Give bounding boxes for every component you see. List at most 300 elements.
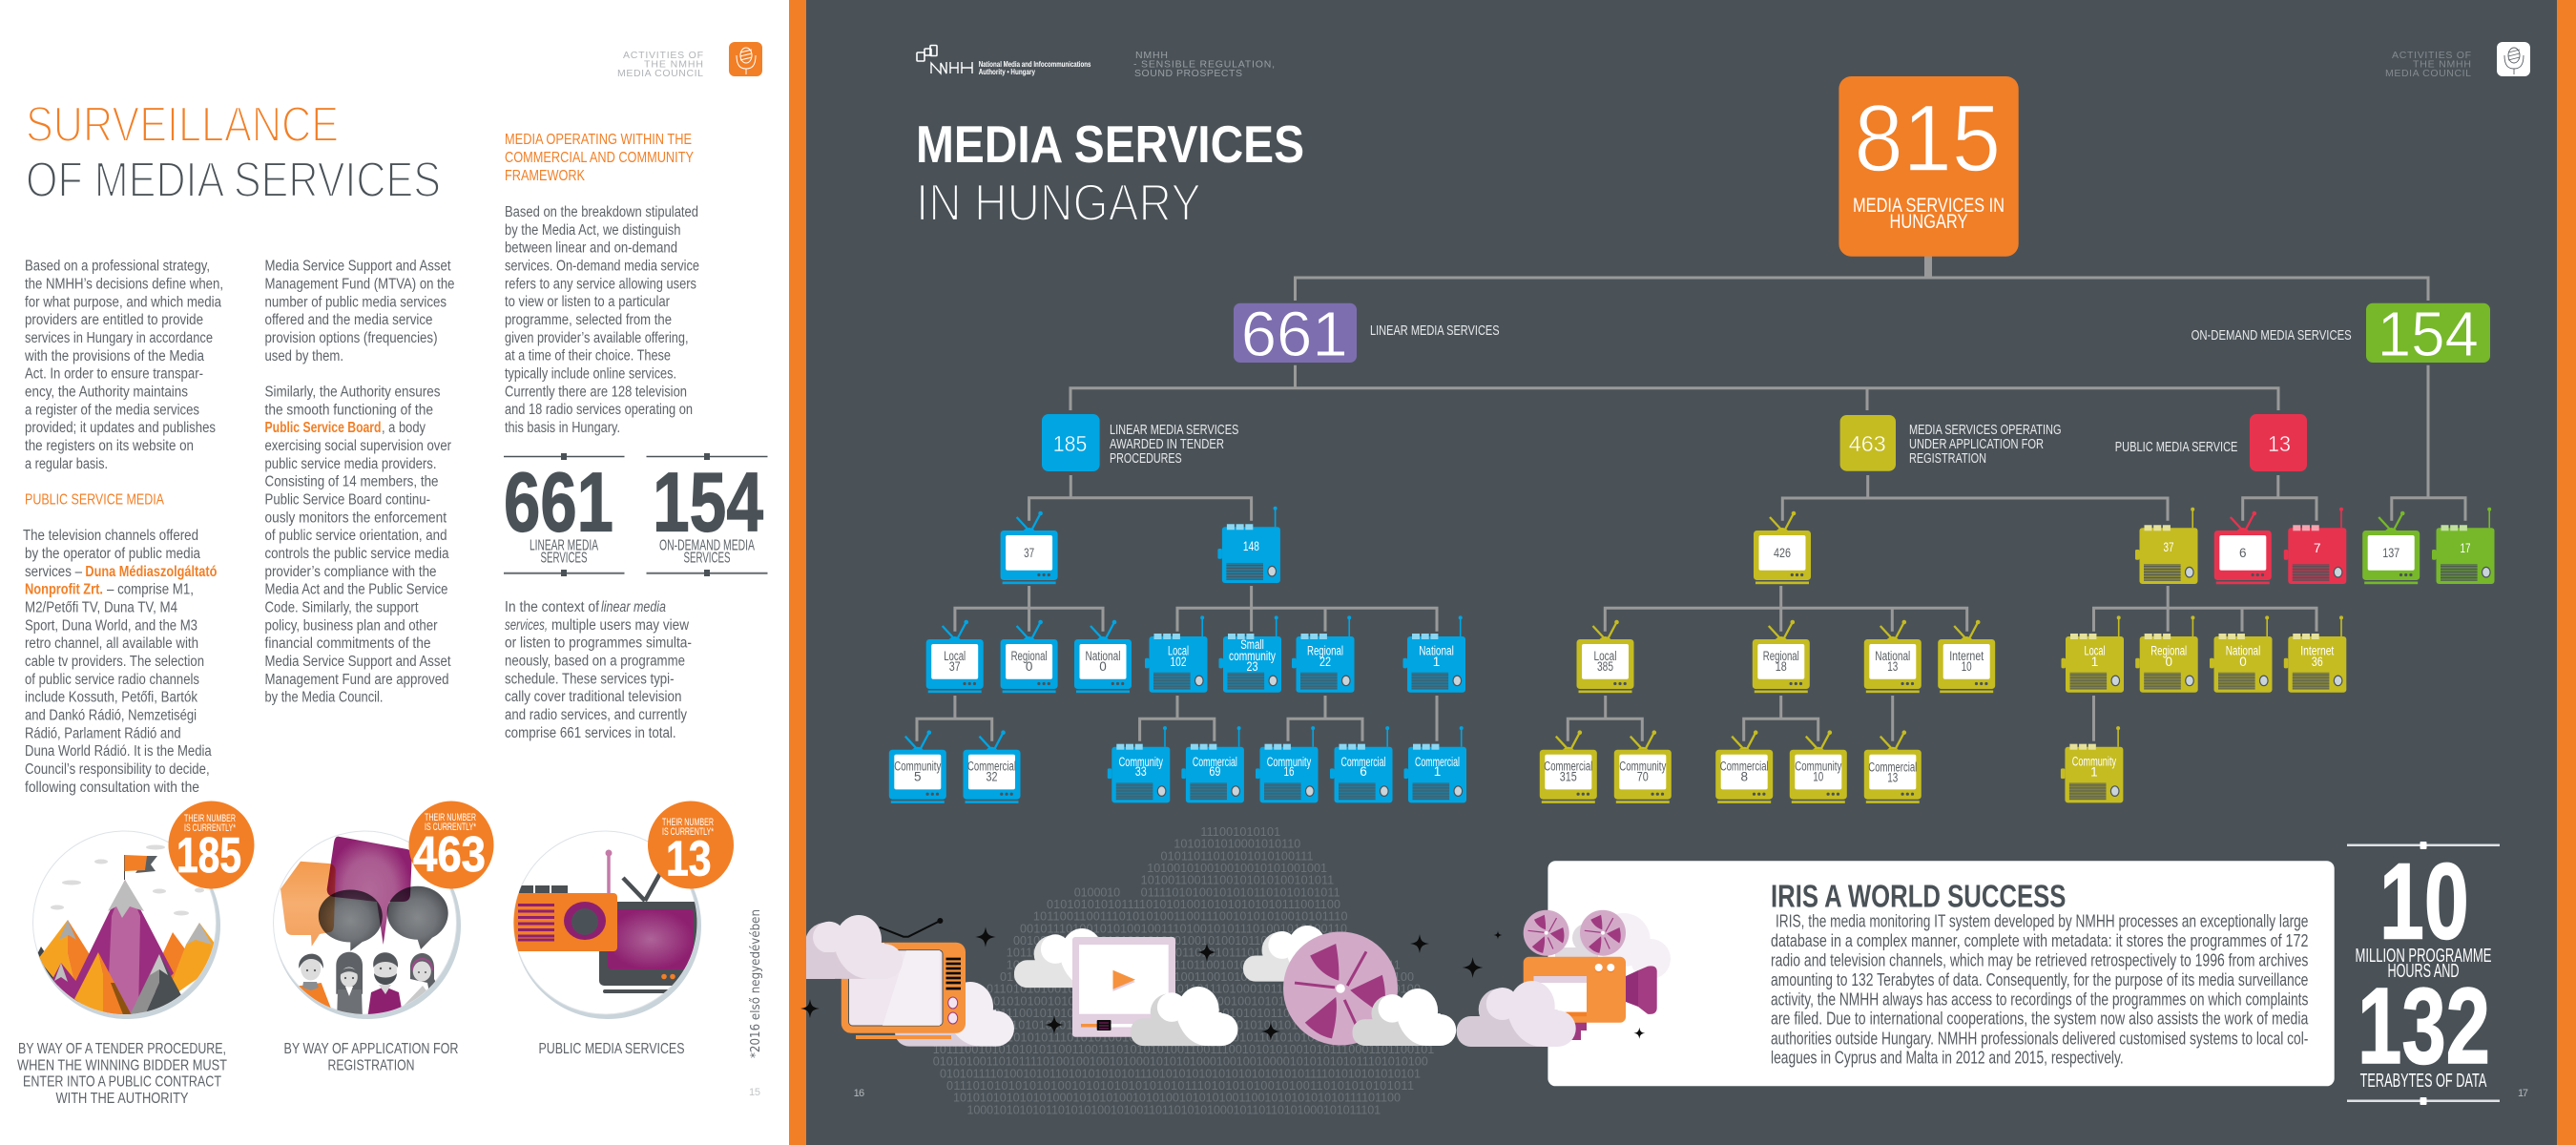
logo: NMHH xyxy=(917,46,1091,76)
tv: national 13: 13 xyxy=(1887,659,1898,674)
tv: regional 18: 18 xyxy=(1776,659,1787,674)
text column 1: provided; it updates and publishes xyxy=(25,420,216,436)
tv: commercial 13: 13 xyxy=(1887,771,1898,785)
tv: regional 0: Regional xyxy=(1011,649,1048,663)
title: media services in Hungary: MEDIA SERVICES xyxy=(916,114,1304,174)
page number 15: 15 xyxy=(749,1087,760,1098)
text column 1: PUBLIC SERVICE MEDIA xyxy=(25,492,165,508)
text column 1: Rádió, Parlament Rádió and xyxy=(25,725,181,741)
radio: regional 22: 22 xyxy=(1319,655,1331,669)
text column 3 lower: and radio services, and currently xyxy=(505,707,687,723)
radio: regional 0 xyxy=(2135,615,2198,693)
binary code cloud: 111001010101 xyxy=(1200,825,1280,839)
IRIS body text: leagues in Cyprus and Malta in 2012 and 2015, respectively. xyxy=(1771,1048,2124,1067)
tv: commercial 315: Commercial xyxy=(1544,760,1592,774)
person: woman in grey xyxy=(336,952,363,1021)
section header: left: MEDIA COUNCIL xyxy=(617,68,703,79)
binary code cloud: 10101010010101100101010101101100101010010101011010100101011 xyxy=(1007,958,1401,971)
tv: 6: 6 xyxy=(2239,546,2247,560)
radio: internet 36 xyxy=(2284,615,2346,693)
tv: commercial 315: 315 xyxy=(1560,770,1577,784)
tv: internet 10 xyxy=(1938,620,1995,693)
caption: public media services: PUBLIC MEDIA SERVICES xyxy=(538,1041,685,1057)
IRIS body text xyxy=(1771,912,2309,1067)
text column 2: Code. Similarly, the support xyxy=(265,599,419,615)
binary code cloud: 0010010101010010100101010100101001011010101001010101 xyxy=(1013,934,1361,947)
caption: tender procedure: WITH THE AUTHORITY xyxy=(55,1091,189,1107)
text column 1: the NMHH’s decisions define when, xyxy=(25,277,223,292)
label: linear media services: LINEAR MEDIA SERVICES xyxy=(1370,323,1500,339)
binary code cloud: 0111010101010101001010101010101010111010101010010100110101010101011 xyxy=(946,1079,1414,1093)
text column 3 upper: this basis in Hungary. xyxy=(505,420,620,436)
radio: community 33: Community xyxy=(1119,755,1163,769)
badge: 463: THEIR NUMBER xyxy=(425,812,476,823)
stat: 154 on-demand media services xyxy=(647,453,767,576)
radio: community 16 xyxy=(1256,726,1319,802)
label: public media service: PUBLIC MEDIA SERVICE xyxy=(2115,439,2237,455)
text column 1: following consultation with the xyxy=(25,780,199,796)
illustration: media player tablet with clouds xyxy=(1014,928,1238,1046)
icon: microphone white xyxy=(2497,42,2530,76)
stat: 154 on-demand media services: 154 xyxy=(653,455,763,550)
stat block: 10 million hours and 132 terabytes: HOURS AND xyxy=(2387,961,2460,982)
stat block: 10 million hours and 132 terabytes: 132 xyxy=(2358,966,2490,1086)
illustration: film camera with clouds xyxy=(1457,910,1671,1047)
caption: tender procedure: ENTER INTO A PUBLIC CONTRACT xyxy=(23,1074,221,1091)
binary code cloud: 101001010010010010101001001 xyxy=(1147,862,1327,875)
text column 2: Media Service Support and Asset xyxy=(265,654,451,670)
text column 1: services – xyxy=(25,564,82,580)
text column 1: Act. In order to ensure transpar- xyxy=(25,366,203,383)
text column 1: Sport, Duna World, and the M3 xyxy=(25,617,197,634)
binary code cloud: 011101010101010010101010100101101010010101001010101010100101010111 xyxy=(979,1019,1426,1032)
radio: 148 xyxy=(1217,507,1280,583)
text column 2: Consisting of 14 members, the xyxy=(265,474,439,490)
tv: regional 0 xyxy=(1001,620,1058,693)
text column 2: Public Service Board xyxy=(265,420,382,436)
text column 1: retro channel, all available with xyxy=(25,635,198,652)
text column 3 upper: typically include online services. xyxy=(505,366,676,382)
text column 3 lower: linear media xyxy=(601,599,666,615)
connectors: branches xyxy=(917,365,2465,741)
illustration: mountains with flag xyxy=(31,831,220,1019)
radio: 37: 37 xyxy=(2164,540,2173,554)
heading: media operating: MEDIA OPERATING WITHIN THE xyxy=(505,132,692,148)
text column 1 xyxy=(23,259,223,796)
caption: tender procedure xyxy=(17,1041,227,1107)
tv: 426: 426 xyxy=(1774,546,1791,560)
label: tender: AWARDED IN TENDER xyxy=(1110,436,1224,452)
IRIS body text: activity, the NMHH always has access to recordings of the programmes on which complaints xyxy=(1771,989,2308,1009)
stat: 154 on-demand media services: ON-DEMAND MEDIA xyxy=(659,538,755,553)
text column 3 upper: Currently there are 128 television xyxy=(505,384,687,400)
text column 2: , a body xyxy=(382,420,426,436)
illustration: orange retro television with clouds xyxy=(783,915,1014,1047)
text column 1: for what purpose, and which media xyxy=(25,294,221,310)
box: 463 xyxy=(1840,415,1896,471)
box: 185 xyxy=(1042,414,1100,471)
radio: 148: 148 xyxy=(1243,539,1259,553)
radio: small community 23: community xyxy=(1229,649,1276,663)
tv: commercial 32: 32 xyxy=(987,770,998,784)
logo: NMHH: Authority • Hungary xyxy=(979,67,1035,76)
IRIS body text: are filed. Due to international cooperations, the system now also assists the work of media xyxy=(1771,1010,2309,1029)
radio: 17: 17 xyxy=(2460,541,2471,555)
tv: local 385: Local xyxy=(1593,649,1616,663)
badge: 13: IS CURRENTLY* xyxy=(662,826,714,838)
radio: commercial 6: 6 xyxy=(1360,764,1367,779)
box: 13: 13 xyxy=(2268,431,2291,456)
text column 2: Management Fund are approved xyxy=(265,672,448,688)
radio: regional 0: Regional xyxy=(2150,643,2187,658)
label: on-demand media services: ON-DEMAND MEDIA SERVICES xyxy=(2192,327,2352,344)
caption: application for registration: BY WAY OF APPLICATION FOR xyxy=(284,1041,458,1057)
radio: national 0: National xyxy=(2226,643,2260,658)
title: media services in Hungary: IN HUNGARY xyxy=(916,173,1201,232)
text column 3 upper: and 18 radio services operating on xyxy=(505,402,693,418)
label: application: UNDER APPLICATION FOR xyxy=(1909,436,2044,452)
text column 2: policy, business plan and other xyxy=(265,617,437,634)
binary code cloud: 1000101010101101010100101001101101010100010110110101000101011101 xyxy=(967,1103,1381,1116)
radio: community 1: 1 xyxy=(2090,765,2098,779)
text column 3 lower: multiple users may view xyxy=(551,617,690,634)
box: 815 media services in Hungary xyxy=(1839,76,2019,257)
box: 154 on-demand: 154 xyxy=(2378,299,2479,370)
text column 1: by the operator of public media xyxy=(25,546,200,562)
box: 815 media services in Hungary: HUNGARY xyxy=(1889,211,1967,233)
IRIS body text: authorities outside Hungary. NMHH professionals delivered customised systems to local col- xyxy=(1771,1029,2308,1048)
text column 3 lower xyxy=(505,599,692,741)
label: tender: PROCEDURES xyxy=(1110,450,1182,467)
text column 2: controls the public service media xyxy=(265,546,449,562)
radio: community 1: Community xyxy=(2072,754,2116,769)
badge: 13: THEIR NUMBER xyxy=(662,817,714,828)
logo: NMHH: National Media and Infocommunications xyxy=(979,59,1091,69)
tv: local 37: 37 xyxy=(949,659,961,674)
badge: 185: IS CURRENTLY* xyxy=(184,822,236,834)
illustration: radio and television xyxy=(506,831,701,1019)
tv: community 70 xyxy=(1614,730,1672,803)
stat: 154 on-demand media services: SERVICES xyxy=(683,550,731,567)
stat block: 10 million hours and 132 terabytes: MILLION PROGRAMME xyxy=(2355,946,2492,967)
tv: national 13: National xyxy=(1875,649,1910,663)
binary code cloud: 10110011001110101010011001110010101010010101110 xyxy=(1033,910,1347,924)
radio: regional 0: 0 xyxy=(2165,655,2172,669)
binary code cloud: 10101010101010100010101010010101001010101001100101010101010111101100 xyxy=(953,1092,1401,1105)
radio: community 1 xyxy=(2061,726,2123,802)
tagline: NMHH xyxy=(1135,50,1168,61)
text column 2: Similarly, the Authority ensures xyxy=(265,384,441,401)
text column 3 upper: given provider’s available offering, xyxy=(505,330,689,346)
text column 2: Management Fund (MTVA) on the xyxy=(265,277,454,292)
text column 3 upper: by the Media Act, we distinguish xyxy=(505,222,681,239)
title: surveillance of media services: SURVEILLANCE xyxy=(26,97,339,153)
box: 13 xyxy=(2250,414,2307,471)
radio: community 33: 33 xyxy=(1135,764,1147,779)
radio: local 102 xyxy=(1145,615,1208,693)
tv: 37: 37 xyxy=(1024,546,1034,560)
text column 1: a register of the media services xyxy=(25,402,199,418)
radio: internet 36: Internet xyxy=(2300,643,2334,658)
box: 463: 463 xyxy=(1849,431,1886,456)
text column 1: services in Hungary in accordance xyxy=(25,330,213,346)
text column 1: with the provisions of the Media xyxy=(24,348,204,364)
text column 1: and Dankó Rádió, Nemzetiségi xyxy=(25,707,197,723)
box: 815 media services in Hungary: MEDIA SERVICES IN xyxy=(1853,195,2005,217)
stat: 661 linear media services xyxy=(504,453,624,576)
section header: right: ACTIVITIES OF xyxy=(2392,50,2471,61)
tv: internet 10: 10 xyxy=(1962,659,1972,674)
text column 3 lower: schedule. These services typi- xyxy=(505,671,674,687)
text column 2: by the Media Council. xyxy=(265,690,384,706)
text column 1: the registers on its website on xyxy=(25,438,194,454)
panel: IRIS text card xyxy=(1548,861,2335,1086)
text column 2: number of public media services xyxy=(265,294,447,310)
binary code cloud: 1011001010101010010101001011010101110101001010110101010 xyxy=(1007,947,1376,960)
text column 1: include Kossuth, Petőfi, Bartók xyxy=(25,690,197,706)
section header: right xyxy=(2385,50,2471,79)
badge: 13: 13 xyxy=(666,832,712,887)
text column 3 lower: cally cover traditional television xyxy=(505,689,681,705)
IRIS body text: amounting to 132 Terabytes of data. Consequently, for the purpose of its media surveillance xyxy=(1771,970,2308,989)
stat block: 10 million hours and 132 terabytes: TERABYTES OF DATA xyxy=(2360,1071,2487,1092)
tv: regional 18 xyxy=(1753,620,1810,693)
root thick stem xyxy=(1924,256,1932,278)
title: surveillance of media services: OF MEDIA SERVICES xyxy=(26,153,441,208)
heading: media operating: COMMERCIAL AND COMMUNITY xyxy=(505,150,694,166)
page numbers xyxy=(854,1088,2528,1099)
binary code cloud: 01011011010101010100111 xyxy=(1160,849,1313,863)
radio: regional 22 xyxy=(1292,615,1355,693)
person: man in orange xyxy=(299,954,331,1008)
radio: small community 23 xyxy=(1219,615,1281,693)
caption: application for registration: REGISTRATION xyxy=(328,1057,414,1073)
text column 2: exercising social supervision over xyxy=(265,438,451,454)
tree: blue tender branch xyxy=(889,507,1466,803)
section header: left: THE NMHH xyxy=(644,59,703,71)
label: application xyxy=(1909,422,2061,467)
tv: commercial 8: 8 xyxy=(1740,770,1748,784)
connectors: root level xyxy=(1296,256,2428,301)
text column 3 lower: neously, based on a programme xyxy=(505,653,685,670)
tagline: - SENSIBLE REGULATION, xyxy=(1133,59,1275,71)
stat: 661 linear media services: LINEAR MEDIA xyxy=(530,538,598,553)
tv: commercial 8: Commercial xyxy=(1720,760,1769,774)
tree: red public branch xyxy=(2214,508,2346,584)
tv: internet 10: Internet xyxy=(1949,649,1984,663)
icon: sparkles xyxy=(800,926,1502,1041)
person: woman with headband xyxy=(405,953,435,1006)
text column 3 upper: between linear and on-demand xyxy=(505,240,677,257)
heading: media operating: FRAMEWORK xyxy=(505,168,586,184)
text column 1: – comprise M1, xyxy=(107,582,194,598)
section header: right: MEDIA COUNCIL xyxy=(2385,68,2471,79)
radio: local 102: 102 xyxy=(1170,655,1187,669)
panel: left white page xyxy=(0,0,789,1145)
orange right edge xyxy=(2557,0,2576,1145)
tv: community 70: Community xyxy=(1619,760,1666,774)
tv: commercial 32: Commercial xyxy=(967,760,1016,774)
tv: regional 18: Regional xyxy=(1763,649,1799,663)
stat block: 10 million hours and 132 terabytes: 10 xyxy=(2379,841,2469,961)
radio: 7: 7 xyxy=(2314,541,2321,555)
label: application: MEDIA SERVICES OPERATING xyxy=(1909,422,2061,438)
text column 3 upper: at a time of their choice. These xyxy=(505,348,671,364)
binary code cloud: 1010101010001010110 xyxy=(1174,838,1300,851)
text column 1: Council’s responsibility to decide, xyxy=(25,761,210,778)
orange spine xyxy=(789,0,806,1145)
connectors: level 2 xyxy=(1070,365,2278,410)
text column 2 xyxy=(265,259,454,706)
text column 1: of public service radio channels xyxy=(25,672,199,688)
radio: internet 36: 36 xyxy=(2312,655,2323,669)
radio: small community 23: Small xyxy=(1240,637,1264,652)
tv: regional 0: 0 xyxy=(1026,659,1032,674)
text column 1: The television channels offered xyxy=(23,528,198,544)
binary code cloud: 0010111010010101001001110100101011101001010100110 xyxy=(1020,922,1347,935)
radio: community 16: 16 xyxy=(1284,764,1294,779)
radio: commercial 69: Commercial xyxy=(1193,755,1237,769)
title: surveillance of media services xyxy=(26,97,441,208)
title: media services in Hungary xyxy=(916,114,1304,232)
IRIS body text: database in a complex manner, complete with metadata: it stores the programmes of 172 xyxy=(1771,931,2308,950)
text column 3 lower: services, xyxy=(505,617,548,634)
section header: left xyxy=(617,50,703,79)
stat: 661 linear media services: SERVICES xyxy=(540,550,588,567)
binary code cloud: 11011010101011101010100101010101010100101011010101010010101010100101 xyxy=(967,1030,1431,1044)
tv: 137: 137 xyxy=(2382,546,2399,560)
label: tender: LINEAR MEDIA SERVICES xyxy=(1110,422,1238,438)
page numbers: 17 xyxy=(2518,1088,2528,1099)
binary code cloud: 10100110011100101010100101011 xyxy=(1141,874,1334,887)
tagline xyxy=(1133,50,1275,79)
text column 1: providers are entitled to provide xyxy=(25,312,203,328)
radio: commercial 69: 69 xyxy=(1209,764,1220,779)
badge: 185: 185 xyxy=(177,828,241,884)
tv: 37 xyxy=(1001,511,1058,584)
tv: national 0: National xyxy=(1086,649,1121,663)
radio: national 1: 1 xyxy=(1433,655,1440,669)
badge: 463 xyxy=(408,802,494,889)
tv: community 5: 5 xyxy=(914,770,922,784)
text column 1: Duna Médiaszolgáltató xyxy=(85,564,217,580)
radio: national 0 xyxy=(2210,615,2273,693)
text column 2: Media Service Support and Asset xyxy=(265,259,451,275)
tv: local 37 xyxy=(926,620,984,693)
heading: IRIS a world success: IRIS A WORLD SUCCESS xyxy=(1771,879,2066,914)
radio: local 1 xyxy=(2061,615,2124,693)
binary code cloud: 0110101010010101011001010101011011101000101101010010101010100100 xyxy=(987,983,1421,996)
tv: commercial 8 xyxy=(1715,730,1773,803)
tv: commercial 13 xyxy=(1864,730,1922,803)
text column 2: provider’s compliance with the xyxy=(265,564,437,580)
tagline: SOUND PROSPECTS xyxy=(1134,68,1242,79)
label: application: REGISTRATION xyxy=(1909,450,1986,467)
binary code cloud: 0100010 xyxy=(1074,885,1120,899)
radio: community 33 xyxy=(1108,726,1170,802)
text column 2: the smooth functioning of the xyxy=(265,402,433,418)
IRIS body text: IRIS, the media monitoring IT system developed by NMHH processes an exceptionally large xyxy=(1776,912,2308,931)
box: 185: 185 xyxy=(1053,431,1087,456)
radio: local 102: Local xyxy=(1168,643,1189,658)
radio: small community 23: 23 xyxy=(1246,659,1257,674)
text column 1: cable tv providers. The selection xyxy=(25,654,204,670)
text column 2: Media Act and the Public Service xyxy=(265,582,448,598)
tv: community 10: Community xyxy=(1795,760,1841,774)
IRIS body text: radio and television channels, which may be retrieved retrospectively to 1996 from archives xyxy=(1771,951,2308,970)
label: tender xyxy=(1110,422,1238,467)
radio: commercial 6: Commercial xyxy=(1341,755,1385,769)
radio: local 1: 1 xyxy=(2091,655,2098,669)
radio: commercial 1: 1 xyxy=(1434,764,1441,779)
binary code cloud xyxy=(933,825,1434,1116)
text column 3 upper xyxy=(505,204,699,436)
caption: tender procedure: BY WAY OF A TENDER PROCEDURE, xyxy=(18,1041,226,1057)
tv: community 5: Community xyxy=(894,760,941,774)
badge: 185 xyxy=(168,802,254,889)
text column 2: financial commitments of the xyxy=(265,635,431,652)
tree: gold registration branch xyxy=(1540,508,2346,803)
text column 3 lower: or listen to programmes simulta- xyxy=(505,635,692,652)
illustration: speech bubbles and people xyxy=(273,831,461,1026)
page numbers: 16 xyxy=(854,1088,864,1099)
binary code cloud: 1011100101010101110010101011010010101010101101010010101010100101 xyxy=(987,1007,1421,1020)
tv: 426 xyxy=(1754,511,1811,584)
tv: national 0: 0 xyxy=(1099,659,1107,674)
box: 815 media services in Hungary: 815 xyxy=(1855,85,2001,191)
section header: right: THE NMHH xyxy=(2413,59,2471,71)
binary code cloud: 1011100101010101011001100111010101010011001110010101010010101110001101100101 xyxy=(933,1043,1434,1056)
badge: 13 xyxy=(648,802,734,889)
binary code cloud: 01010111101001010110101010101011101010101010101010101010111101010101010101 xyxy=(940,1067,1421,1080)
text column 3 upper: to view or listen to a particular xyxy=(505,294,670,310)
tv: community 10: 10 xyxy=(1813,770,1823,784)
radio: national 1: National xyxy=(1419,643,1454,658)
radio: commercial 6 xyxy=(1330,726,1393,802)
text column 3 upper: programme, selected from the xyxy=(505,312,672,328)
text column 2: used by them. xyxy=(265,348,343,364)
tv: commercial 32 xyxy=(964,730,1021,803)
illustration: film reel with clouds xyxy=(1243,926,1456,1046)
text column 2: provision options (frequencies) xyxy=(265,330,437,346)
binary code cloud: 01010101001010101001010011100110010101010011100101010101001100 xyxy=(1000,970,1414,984)
tv: community 70: 70 xyxy=(1637,770,1649,784)
text column 1: Nonprofit Zrt. xyxy=(25,582,103,598)
radio: regional 22: Regional xyxy=(1307,643,1343,658)
text column 1: ency, the Authority maintains xyxy=(25,384,188,401)
radio: local 1: Local xyxy=(2084,643,2105,658)
radio: commercial 69 xyxy=(1181,726,1244,802)
stat: 661 linear media services: 661 xyxy=(504,455,613,550)
tv: local 385: 385 xyxy=(1597,659,1613,674)
binary code cloud: 01010101010111101010100101010101010111001100 xyxy=(1047,898,1340,911)
tv: local 37: Local xyxy=(944,649,966,663)
caption: tender procedure: WHEN THE WINNING BIDDER MUST xyxy=(17,1057,227,1073)
caption: application for registration xyxy=(284,1041,458,1073)
section header: left: ACTIVITIES OF xyxy=(623,50,703,61)
text column 1: Based on a professional strategy, xyxy=(25,259,210,275)
heading: media operating xyxy=(505,132,694,184)
text column 3 upper: services. On-demand media service xyxy=(505,258,699,275)
text column 1: Duna World Rádió. It is the Media xyxy=(25,743,212,760)
person: bearded man in purple xyxy=(368,952,401,1014)
badge: 463: 463 xyxy=(413,827,486,883)
footnote rotated: *2016 első negyedévében xyxy=(748,909,763,1058)
text column 2: ously monitors the enforcement xyxy=(265,510,447,526)
radio: national 1 xyxy=(1402,615,1465,693)
tv: national 13 xyxy=(1864,620,1922,693)
tv: community 10 xyxy=(1790,730,1847,803)
